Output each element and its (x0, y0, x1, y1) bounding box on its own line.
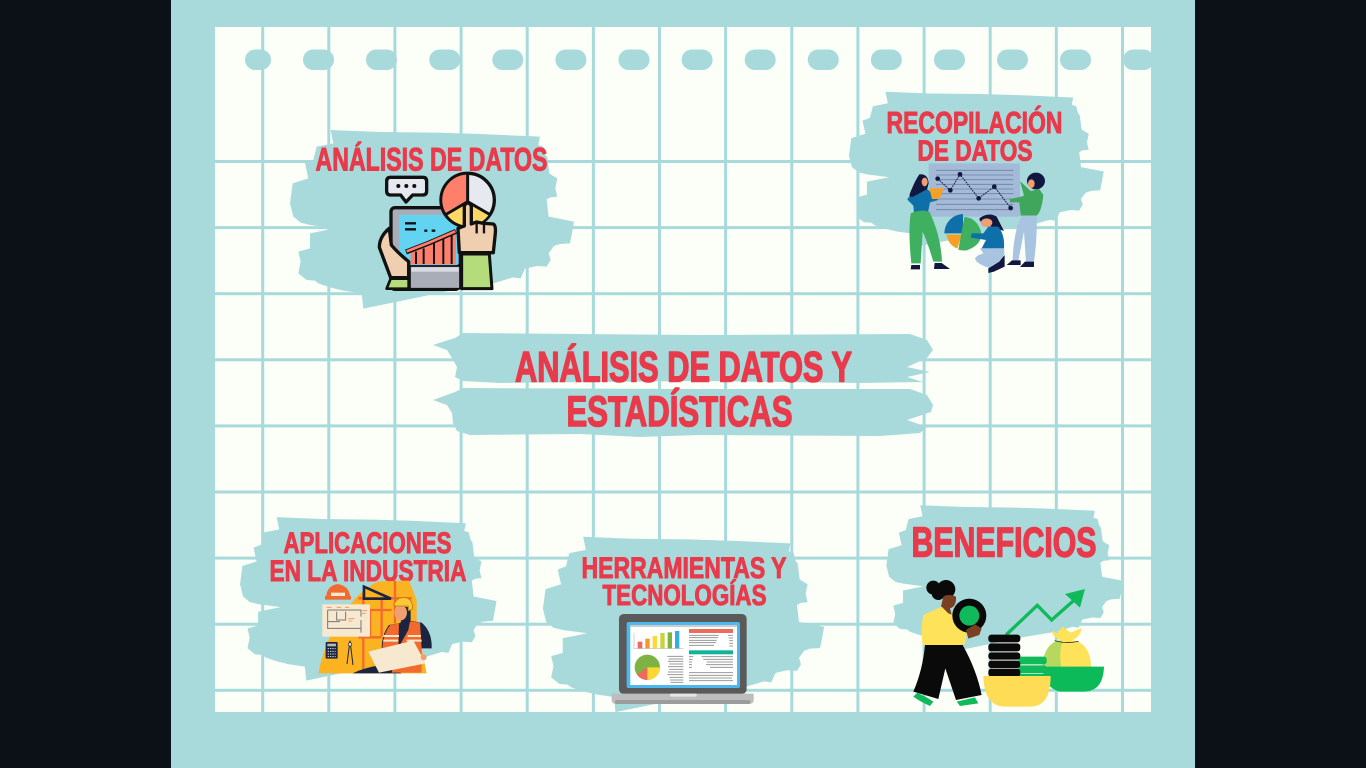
green coins (1018, 657, 1047, 678)
brush background (543, 537, 824, 712)
left hand and sleeve (379, 228, 409, 278)
compass (347, 641, 353, 665)
yellow bowl (983, 676, 1051, 707)
pie chart (441, 173, 494, 227)
bar chart (634, 631, 683, 649)
panel: recopilación de datos (849, 92, 1104, 273)
heading: aplicaciones: APLICACIONES (284, 527, 452, 560)
icon: person with coins and growth arrow (913, 580, 1104, 707)
brush background (849, 92, 1104, 247)
icon: team with board (908, 163, 1045, 273)
money bag (1042, 640, 1091, 670)
yellow background blob (318, 581, 427, 673)
hard hat (326, 584, 350, 596)
tablet body (391, 208, 459, 289)
worker (352, 598, 432, 673)
scaffold (358, 581, 412, 673)
brush strip: bottom (433, 388, 933, 437)
black coins (988, 635, 1020, 677)
pie chart (635, 655, 660, 680)
icon: laptop dashboard (612, 614, 754, 704)
heading: de datos: DE DATOS (918, 136, 1032, 168)
brush background (290, 130, 574, 309)
crouching woman (971, 215, 1005, 273)
panel: análisis de datos (290, 130, 574, 309)
standing man (1007, 173, 1045, 267)
panel: aplicaciones en la industria (240, 517, 496, 681)
heading: beneficios: BENEFICIOS (912, 518, 1096, 566)
growth arrow (1006, 599, 1075, 635)
line chart board (929, 163, 1020, 217)
speech bubble (387, 177, 427, 202)
person (913, 580, 986, 706)
right hand and sleeve (458, 203, 495, 253)
title line 2: ESTADÍSTICAS (566, 388, 792, 436)
green bowl (1043, 667, 1104, 692)
heading: en la industria: EN LA INDUSTRIA (270, 555, 466, 588)
standing woman (908, 174, 950, 269)
pie chart (944, 214, 981, 251)
heading: recopilación: RECOPILACIÓN (886, 104, 1062, 140)
laptop base (612, 694, 754, 704)
icon: construction engineer (318, 581, 432, 673)
brush background (886, 505, 1123, 653)
text rows (667, 635, 733, 682)
brush strip: top (433, 333, 933, 383)
brush background (240, 517, 496, 681)
icon: tablet with chart and pie (379, 173, 495, 289)
set square (364, 587, 391, 599)
panel: herramientas y tecnologías (543, 537, 824, 712)
heading: análisis de datos: ANÁLISIS DE DATOS (316, 142, 548, 178)
blueprint (322, 604, 370, 637)
title line 1: ANÁLISIS DE DATOS Y (515, 344, 852, 392)
calculator (326, 642, 338, 659)
heading: herramientas y: HERRAMIENTAS Y (582, 552, 786, 585)
laptop lid (619, 614, 747, 694)
panel: beneficios (886, 505, 1123, 707)
heading: tecnologías: TECNOLOGÍAS (602, 578, 766, 612)
panel: título central (433, 333, 933, 437)
